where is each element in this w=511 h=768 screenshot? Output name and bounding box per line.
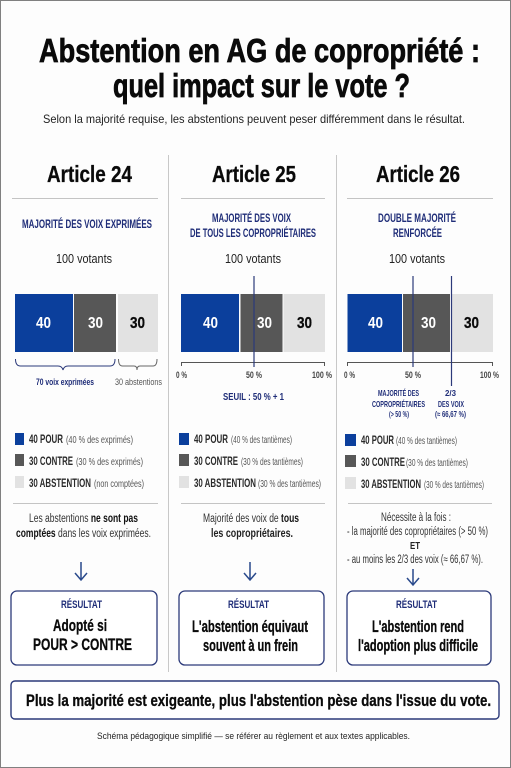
result box: article 24: RÉSULTAT: [61, 598, 102, 611]
axis: article 26: 100 %: [480, 370, 499, 381]
threshold label: majority of owners: (> 50 %): [389, 409, 409, 419]
threshold line: 50 %: [253, 276, 255, 367]
stacked bar: article 24: [15, 294, 158, 352]
legend: article 26: 40 POUR: [361, 435, 394, 447]
threshold label: two thirds: DES VOIX: [438, 399, 464, 409]
threshold label: SEUIL : 50 % + 1: [223, 391, 284, 403]
explanation: article 25: [203, 513, 299, 540]
legend: article 25: (40 % des tantièmes): [231, 435, 292, 446]
axis: article 26: 50 %: [405, 370, 421, 381]
legend: article 25: (30 % des tantièmes): [258, 479, 321, 490]
stacked bar: article 26: 30: [421, 315, 436, 332]
stacked bar: article 26: 30: [464, 315, 479, 332]
subtitle: Selon la majorité requise, les abstentions peuvent peser différemment dans le résultat.: [43, 112, 465, 126]
stacked bar: article 25: 30: [257, 315, 272, 332]
majority type: article 26: RENFORCÉE: [393, 227, 442, 240]
stacked bar: article 26: 40: [368, 315, 383, 332]
axis: article 25: 50 %: [246, 370, 262, 381]
legend: article 25: 40 POUR: [194, 434, 228, 446]
heading: article 26: Article 26: [376, 161, 460, 187]
voter count: 100 votants: [56, 251, 112, 266]
stacked bar: article 24: 30: [130, 315, 145, 332]
explanation: article 25: Majorité des voix de tous: [203, 513, 299, 525]
majority type: article 25: [190, 212, 316, 240]
brace: expressed votes: [16, 359, 115, 388]
stacked bar: article 24: 30: [88, 315, 103, 332]
legend: article 25: (30 % des tantièmes): [241, 457, 303, 468]
legend: article 26: 30 CONTRE: [361, 457, 405, 469]
arrow: article 26: [407, 569, 419, 585]
explanation: article 26: ET: [410, 540, 420, 552]
legend: article 26: [345, 434, 484, 491]
legend: article 24: (30 % des exprimés): [76, 457, 143, 468]
majority type: article 25: MAJORITÉ DES VOIX: [212, 212, 291, 225]
explanation: article 24: Les abstentions ne sont pas: [29, 513, 138, 525]
arrow: article 25: [244, 562, 256, 580]
legend: article 26: (40 % des tantièmes): [396, 436, 457, 447]
explanation: article 26: [347, 512, 488, 566]
explanation: article 25: les copropriétaires.: [211, 528, 293, 540]
arrow: article 24: [75, 562, 87, 580]
title: quel impact sur le vote ?: [113, 67, 410, 104]
legend: article 24: 30 CONTRE: [29, 456, 73, 468]
threshold label: two thirds: 2/3: [445, 388, 456, 398]
brace: abstentions: [115, 359, 162, 388]
majority type: article 25: DE TOUS LES COPROPRIÉTAIRES: [190, 227, 316, 240]
legend: article 26: 30 ABSTENTION: [361, 479, 421, 491]
majority type: article 26: DOUBLE MAJORITÉ: [378, 212, 456, 225]
threshold label: majority of owners: COPROPRIÉTAIRES: [372, 399, 425, 409]
footnote: Schéma pédagogique simplifié — se référer au règlement et aux textes applicables.: [97, 731, 410, 742]
heading: article 25: Article 25: [212, 161, 296, 187]
legend: article 24: 30 ABSTENTION: [29, 478, 91, 490]
axis: article 26: 0 %: [344, 370, 355, 381]
voter count: 100 votants: [389, 251, 445, 266]
legend: article 24: [15, 433, 144, 490]
voter count: 100 votants: [225, 251, 281, 266]
threshold label: majority of owners: [372, 388, 425, 419]
majority type: article 24: MAJORITÉ DES VOIX EXPRIMÉES: [22, 218, 152, 231]
panel: article 26: [344, 161, 499, 665]
legend: article 25: 30 CONTRE: [194, 456, 238, 468]
legend: article 24: (non comptées): [94, 479, 144, 490]
legend: article 26: (30 % des tantièmes): [406, 458, 468, 469]
explanation: article 24: comptées dans les voix exprimées.: [16, 528, 151, 540]
panel: article 25: [176, 161, 332, 665]
result box: article 24: [11, 591, 157, 665]
result box: article 24: POUR > CONTRE: [33, 635, 132, 654]
stacked bar: article 24: 40: [36, 315, 51, 332]
stacked bar: article 26: [348, 294, 493, 352]
stacked bar: article 25: 40: [203, 315, 218, 332]
result box: article 25: L'abstention équivaut: [192, 618, 308, 636]
result box: article 24: Adopté si: [53, 616, 107, 635]
brace: expressed votes: 70 voix exprimées: [36, 377, 94, 388]
result box: article 26: L'abstention rend: [372, 618, 464, 636]
title: [39, 32, 480, 104]
axis: article 25: 0 %: [176, 370, 187, 381]
threshold label: two thirds: (≈ 66,67 %): [435, 409, 466, 419]
threshold line: 50 %: [412, 276, 414, 367]
majority type: article 26: [378, 212, 456, 240]
result box: article 26: [347, 591, 491, 665]
result box: article 25: RÉSULTAT: [228, 598, 269, 611]
legend: article 25: [179, 433, 321, 490]
heading: article 24: Article 24: [47, 161, 132, 187]
axis: article 26: [344, 362, 499, 381]
explanation: article 24: [16, 513, 151, 540]
stacked bar: article 25: 30: [297, 315, 312, 332]
result box: article 25: souvent à un frein: [203, 637, 298, 655]
result box: article 26: RÉSULTAT: [396, 598, 437, 611]
brace: abstentions: 30 abstentions: [115, 377, 162, 388]
stacked bar: article 25: [181, 294, 325, 352]
conclusion banner: [11, 681, 499, 719]
legend: article 25: 30 ABSTENTION: [194, 478, 256, 490]
threshold line: two thirds: [450, 276, 452, 386]
explanation: article 26: Nécessite à la fois :: [381, 512, 451, 524]
legend: article 24: 40 POUR: [29, 434, 63, 446]
axis: article 25: [176, 362, 332, 381]
panel: article 24: [11, 161, 162, 665]
legend: article 24: (40 % des exprimés): [66, 435, 133, 446]
threshold label: two thirds: [435, 388, 466, 419]
axis: article 25: 100 %: [312, 370, 332, 381]
threshold label: majority of owners: MAJORITÉ DES: [378, 388, 419, 398]
result box: article 25: [179, 591, 324, 665]
